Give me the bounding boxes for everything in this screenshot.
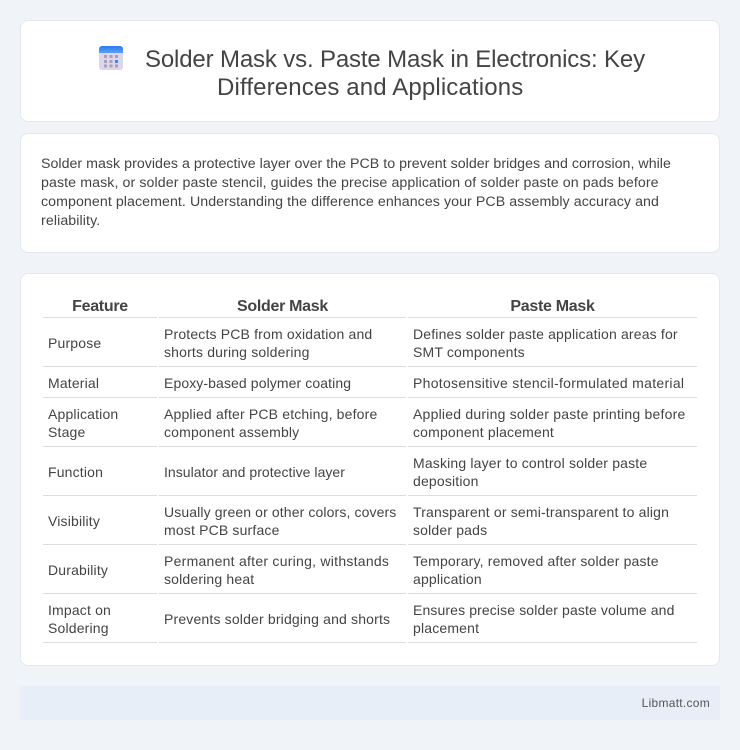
row: purpose: Defines solder paste application areas for [413,326,678,342]
row: impact on soldering: Prevents solder bridging and shorts [164,611,390,627]
row: purpose: SMT components [413,344,525,360]
row: function: deposition [413,473,479,489]
row: impact on soldering: Soldering [48,620,109,636]
row: purpose: Purpose [48,335,101,351]
intro text [41,156,671,229]
header card [20,20,720,122]
row: application stage: component assembly [164,424,299,440]
row: material: Photosensitive stencil-formulated material [413,375,684,391]
row: purpose: shorts during soldering [164,344,310,360]
row: durability: Permanent after curing, withstands [164,553,389,569]
row: material: Epoxy-based polymer coating [164,375,351,391]
row: visibility: Transparent or semi-transparent to align [413,504,669,520]
title [145,46,645,101]
title: Solder Mask vs. Paste Mask in Electronics: Key [145,46,645,73]
row: application stage [48,406,686,440]
row: application stage: Application [48,406,118,422]
row: visibility: Usually green or other colors, covers [164,504,396,520]
footer credit: Libmatt.com [642,696,710,710]
row: application stage: component placement [413,424,554,440]
row: visibility: Visibility [48,513,100,529]
row: visibility [48,504,669,538]
row: application stage: Stage [48,424,85,440]
intro text: paste mask, or solder paste stencil, guides the precise application of solder paste on pads before [41,175,659,191]
row: impact on soldering: Ensures precise solder paste volume and [413,602,674,618]
row: impact on soldering [48,602,674,636]
table card [20,273,720,666]
row: function: Function [48,464,103,480]
title: Differences and Applications [217,74,523,101]
icon: calendar grid [99,46,123,70]
intro text: reliability. [41,213,100,229]
row: function [48,455,647,489]
row: visibility: solder pads [413,522,487,538]
row: purpose: Protects PCB from oxidation and [164,326,372,342]
row: function: Masking layer to control solder paste [413,455,647,471]
row: durability [48,553,659,587]
row: durability: application [413,571,482,587]
intro text: Solder mask provides a protective layer over the PCB to prevent solder bridges and corrosion, while [41,156,671,172]
row: durability: Temporary, removed after solder paste [413,553,659,569]
row: application stage: Applied during solder paste printing before [413,406,686,422]
row: durability: soldering heat [164,571,254,587]
row: purpose [48,326,678,360]
row: durability: Durability [48,562,108,578]
table header [72,298,595,315]
row: impact on soldering: Impact on [48,602,111,618]
row: application stage: Applied after PCB etching, before [164,406,377,422]
table header: Feature [72,298,128,315]
row: material: Material [48,375,99,391]
row: impact on soldering: placement [413,620,479,636]
table header: Solder Mask [237,298,328,315]
intro text: component placement. Understanding the difference enhances your PCB assembly accuracy and [41,194,659,210]
footer bar [20,686,720,720]
table header: Paste Mask [510,298,595,315]
row: material [48,375,684,391]
row: function: Insulator and protective layer [164,464,345,480]
intro card [20,133,720,253]
row: visibility: most PCB surface [164,522,280,538]
